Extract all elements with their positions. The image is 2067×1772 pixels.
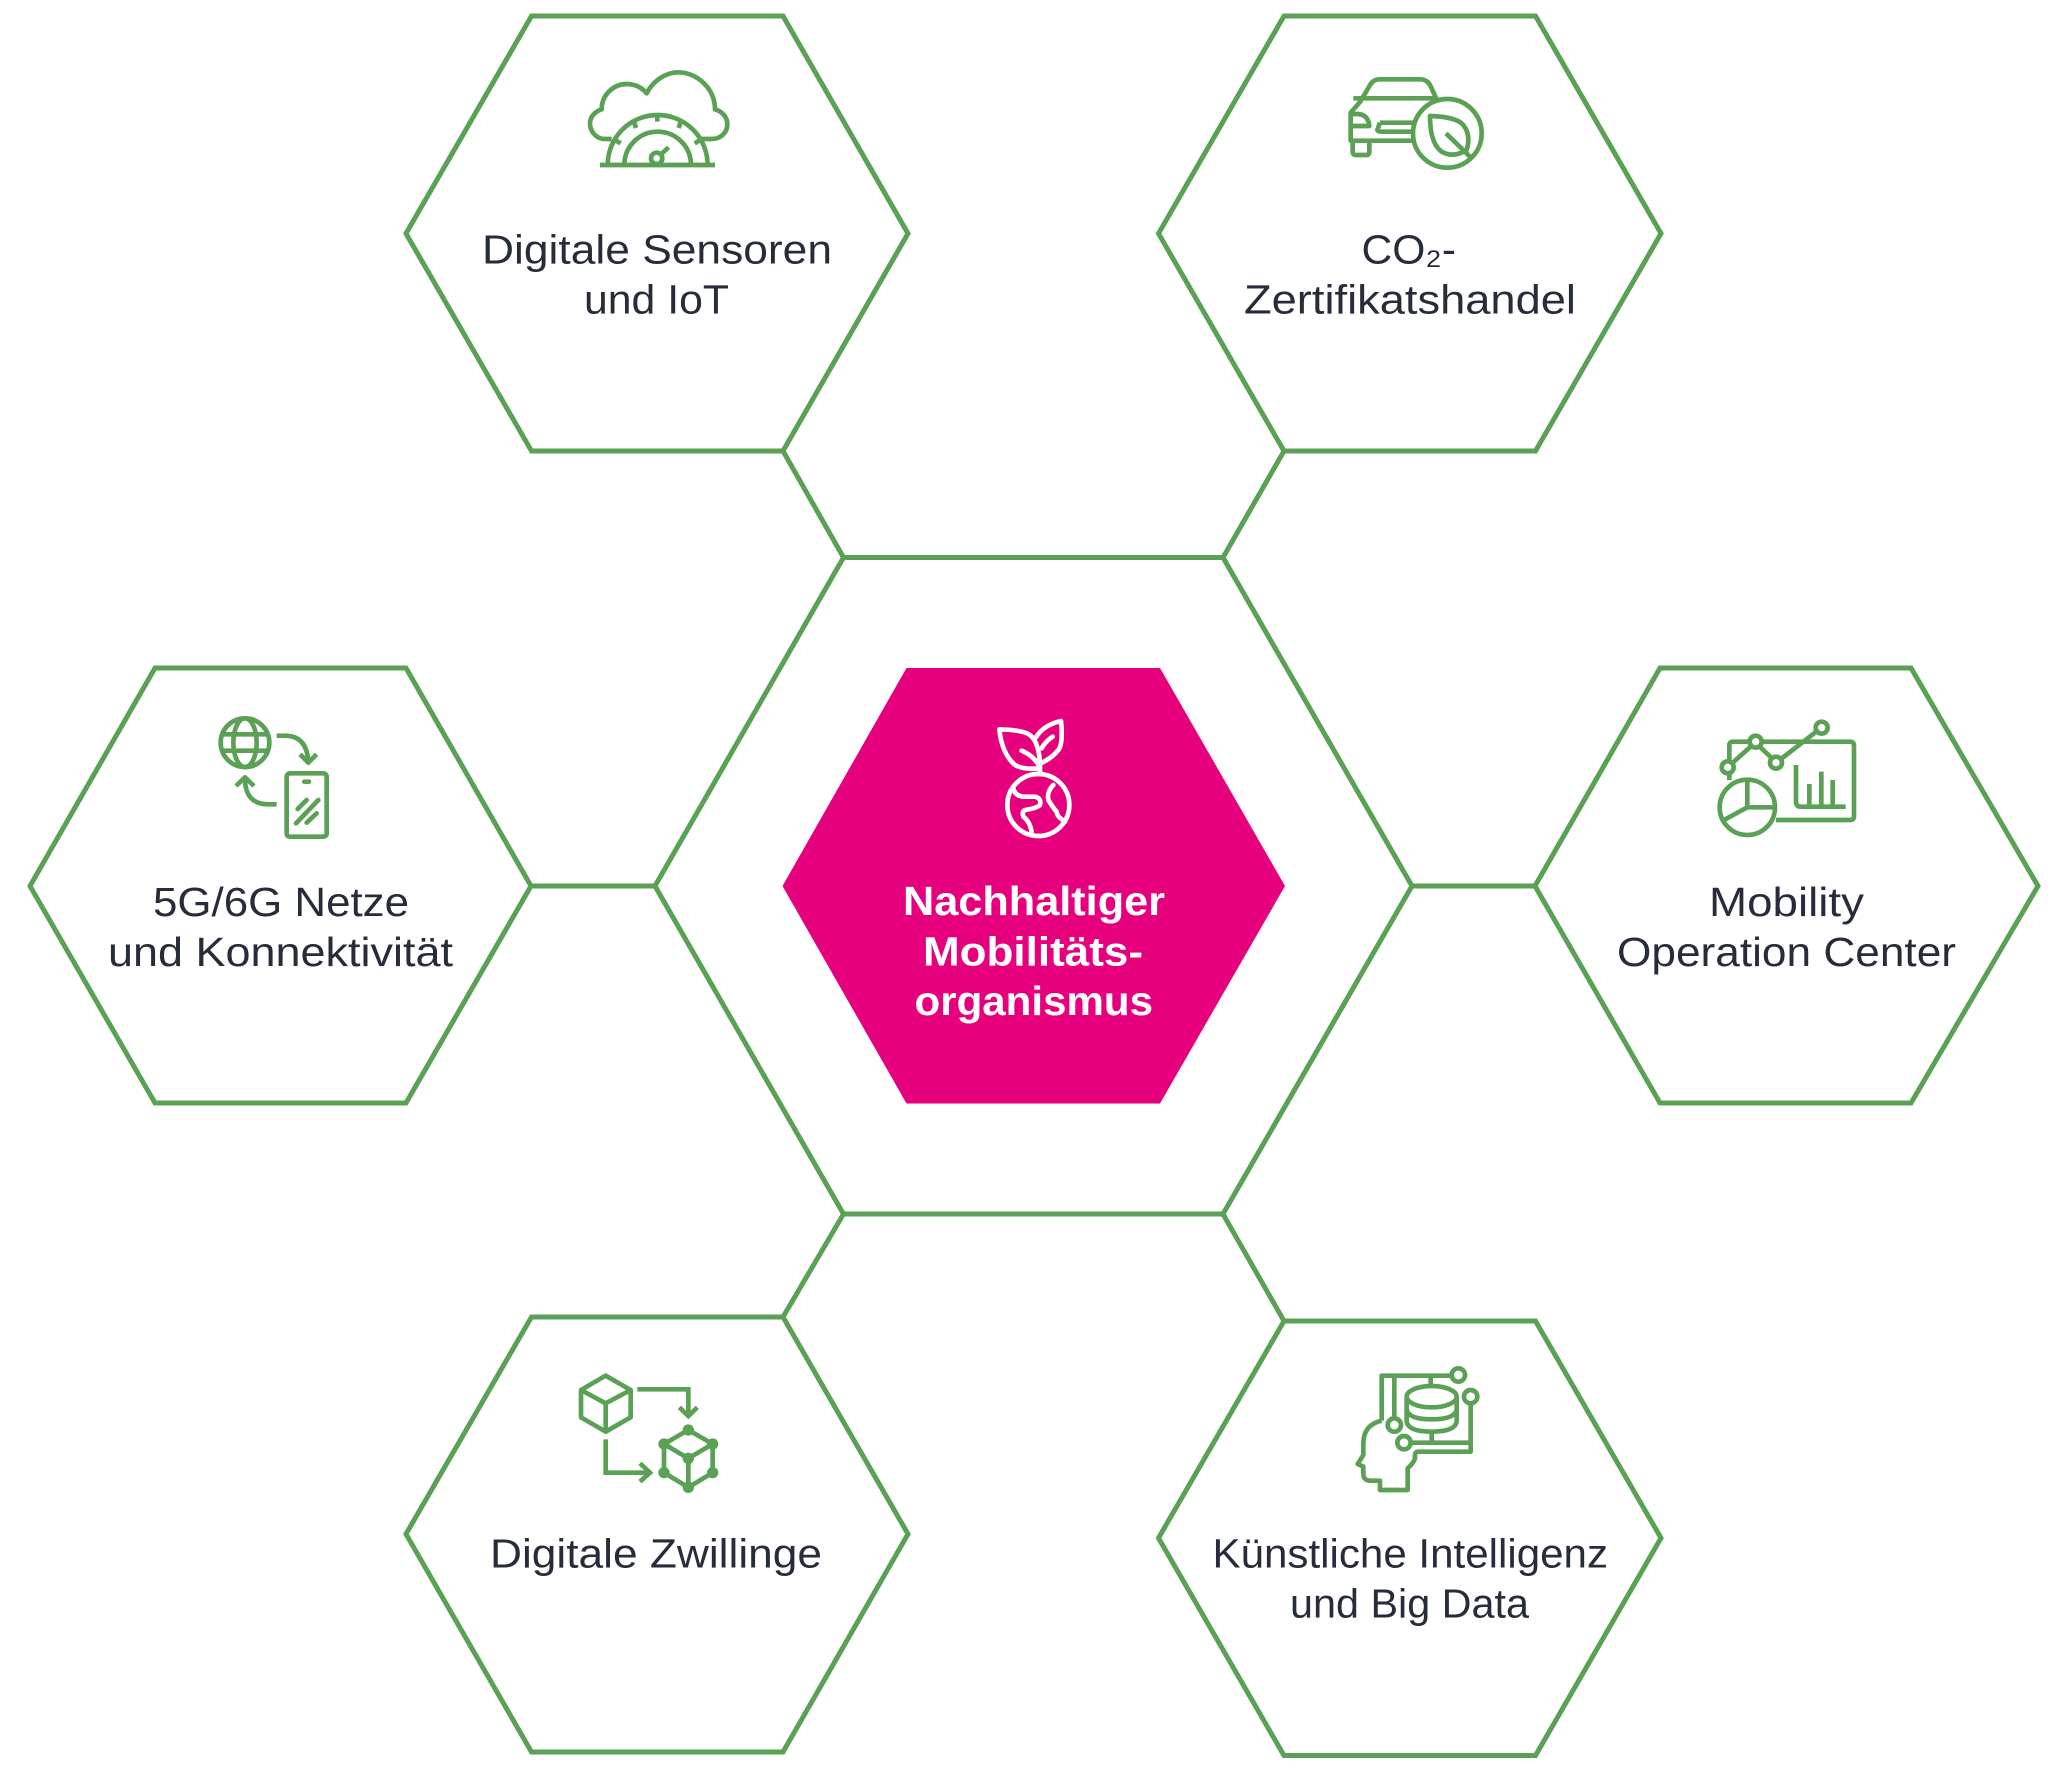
text: label: Operation Center xyxy=(1617,929,1956,975)
heading: centre label: Nachhaltiger xyxy=(903,878,1165,924)
panel: Künstliche Intelligenz und Big Data xyxy=(1158,1321,1661,1756)
panel: Mobility Operation Center xyxy=(1535,668,2038,1103)
icon: globe with sprout xyxy=(999,721,1069,836)
icon: globe and phone exchange xyxy=(221,718,327,837)
text: label: CO₂- xyxy=(1362,226,1456,272)
text: label: und IoT xyxy=(584,276,729,322)
heading: centre label: Mobilitäts- xyxy=(923,928,1143,974)
text: label: und Big Data xyxy=(1290,1580,1529,1626)
panel: centre Nachhaltiger Mobilitätsorganismus xyxy=(782,668,1285,1104)
panel: 5G/6G Netze und Konnektivität xyxy=(30,668,531,1103)
text: label xyxy=(1244,226,1576,322)
heading: centre label xyxy=(903,878,1165,1024)
text: label: 5G/6G Netze xyxy=(153,879,409,925)
panel: CO2-Zertifikatshandel xyxy=(1158,16,1661,451)
icon: head with database circuit xyxy=(1358,1368,1477,1490)
text: label: Digitale Zwillinge xyxy=(490,1530,822,1576)
connectors between hexagons xyxy=(531,451,1535,1321)
text: label: Mobility xyxy=(1709,879,1865,925)
large central hexagon outline xyxy=(655,558,1412,1214)
text: label: Digitale Sensoren xyxy=(482,226,832,272)
text: label: Künstliche Intelligenz xyxy=(1212,1530,1608,1576)
text: label xyxy=(482,226,832,322)
icon: cube to digital twin xyxy=(581,1376,718,1493)
text: label: Zertifikatshandel xyxy=(1244,276,1576,322)
text: label xyxy=(1212,1530,1608,1626)
panel: Digitale Sensoren und IoT xyxy=(406,16,908,451)
icon: cloud with gauge xyxy=(590,72,727,165)
text: label xyxy=(108,879,454,975)
panel: Digitale Zwillinge xyxy=(406,1317,908,1752)
icon: dashboard with charts xyxy=(1720,722,1854,835)
text: label xyxy=(1617,879,1956,975)
text: label: und Konnektivität xyxy=(108,929,454,975)
heading: centre label: organismus xyxy=(914,978,1153,1024)
icon: car with leaf xyxy=(1351,79,1482,168)
